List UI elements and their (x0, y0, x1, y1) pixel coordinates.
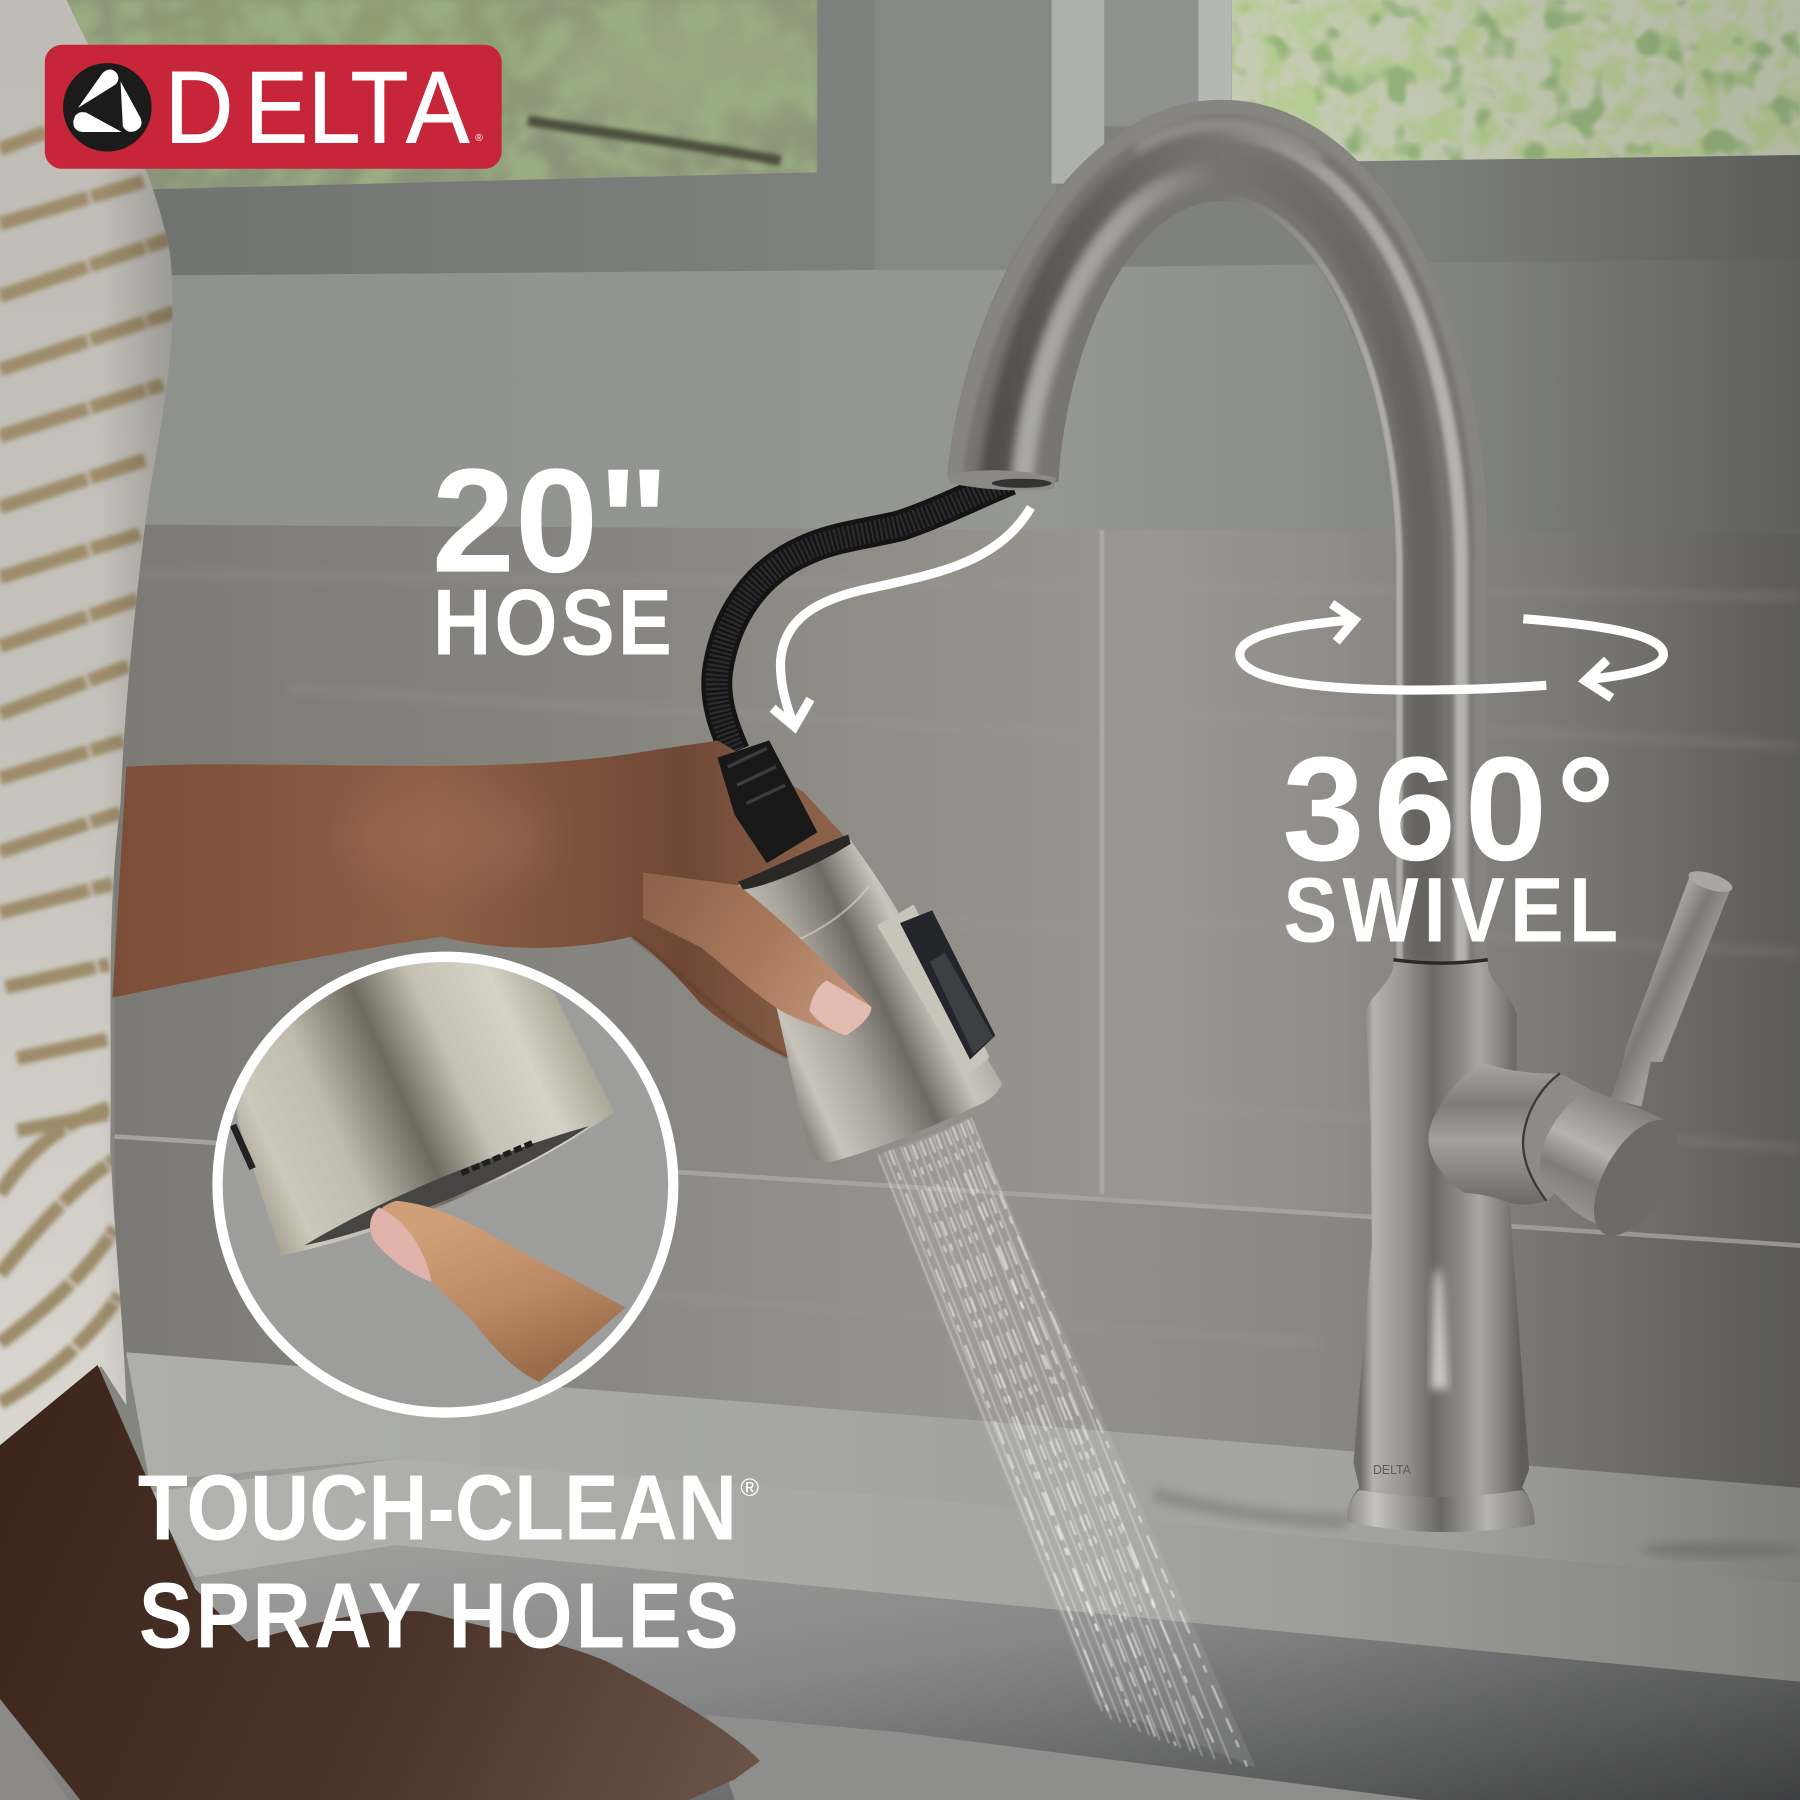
logo wordmark: DELTA (165, 50, 470, 164)
hose coupling (717, 740, 817, 863)
label: 360 degree swivel (1282, 727, 1623, 961)
logo emblem (63, 63, 152, 152)
label: 20 inch hose (432, 439, 675, 674)
spray head collar (738, 835, 851, 890)
inset fingertip (370, 1201, 626, 1382)
inset nozzle (230, 941, 614, 1256)
sweater (0, 0, 184, 1458)
sweater lower hem (0, 1699, 69, 1800)
pull-down spray head (738, 835, 1002, 1163)
faucet gooseneck spout (947, 100, 1488, 964)
resting arm and hand (0, 1365, 760, 1800)
index finger and nail (643, 872, 871, 1035)
label: touch-clean spray holes: SPRAY HOLES (139, 1563, 742, 1667)
inset nozzle opening (304, 1126, 589, 1246)
label: touch-clean spray holes (138, 1455, 759, 1667)
label: 20 inch hose: 20" (432, 439, 669, 604)
window view right (1232, 0, 1800, 163)
Delta logo badge: ® (475, 133, 483, 144)
faucet handle (1428, 867, 1735, 1249)
handle ring (1523, 1073, 1607, 1201)
label: 20 inch hose: HOSE (433, 569, 675, 674)
handle end cap (1577, 1107, 1695, 1249)
label: touch-clean spray holes: ® (740, 1474, 759, 1502)
handle lever (1611, 873, 1731, 1107)
label: 360 degree swivel: 360° (1282, 727, 1615, 892)
handle hub (1428, 1063, 1560, 1205)
spray buttons (877, 905, 995, 1077)
arrow: 360 swivel (1240, 604, 1663, 698)
label: touch-clean spray holes: TOUCH-CLEAN (138, 1455, 737, 1559)
countertop and sink (0, 1352, 1800, 1800)
faucet body (1347, 960, 1535, 1532)
reaching forearm and hand (112, 740, 844, 1057)
faucet base ring (1347, 1490, 1535, 1532)
window view left (66, 0, 818, 190)
label: 360 degree swivel: SWIVEL (1283, 859, 1623, 961)
arrow: hose pull-down (773, 507, 1031, 727)
water spray (877, 1118, 1256, 1768)
inset circle: touch-clean detail (218, 941, 673, 1413)
Delta logo badge (45, 45, 502, 169)
handle cylinder (1540, 1089, 1665, 1235)
faucet logo mark: DELTA (1373, 1463, 1411, 1477)
pull-down hose (717, 480, 1010, 752)
